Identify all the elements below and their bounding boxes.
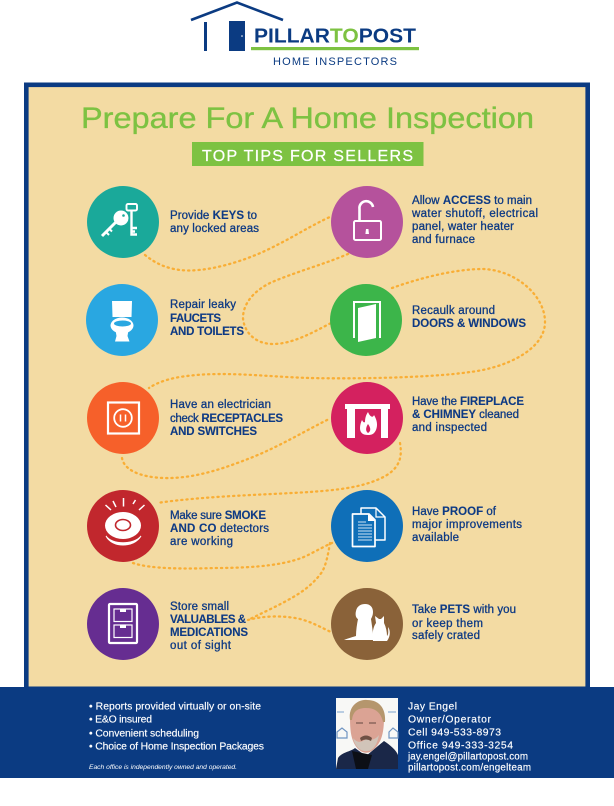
tip: pets: safely crated <box>412 630 480 642</box>
agent contact details: Office 949-333-3254 <box>408 740 513 752</box>
agent photo <box>336 698 398 769</box>
tip: doors and windows <box>330 284 526 356</box>
tip: proof <box>331 490 522 562</box>
tip: faucets and toilets: AND TOILETS <box>170 326 244 338</box>
logo tagline: HOME INSPECTORS <box>273 56 397 68</box>
tip: receptacles: AND SWITCHES <box>170 426 257 438</box>
tip text: Have an electrician <box>170 399 271 411</box>
logo wordmark: PILLARTOPOST <box>254 26 416 48</box>
tip text: Have PROOF of <box>412 506 497 518</box>
icon: house roof and door <box>191 2 283 51</box>
tip: keys: any locked areas <box>170 223 259 235</box>
tip: keys <box>87 186 259 258</box>
tip text: Allow ACCESS to main <box>412 195 532 207</box>
panel: footer <box>0 687 614 778</box>
agent contact details: Jay Engel <box>408 702 457 712</box>
tip: access: and furnace <box>412 234 475 246</box>
tip: access: water shutoff, electrical <box>411 208 538 220</box>
tip: valuables and medications: MEDICATIONS <box>170 627 248 639</box>
tip: smoke and CO detectors <box>87 490 269 562</box>
agent contact details: jay.engel@pillartopost.com <box>407 752 528 762</box>
benefits list: • Reports provided virtually or on-site <box>89 702 261 712</box>
dotted connector path <box>122 216 545 632</box>
tip text: Repair leaky <box>170 299 236 311</box>
tip: doors and windows: DOORS & WINDOWS <box>412 318 526 330</box>
subtitle banner <box>192 142 424 166</box>
tip: fireplace: & CHIMNEY cleaned <box>412 409 519 421</box>
benefits list: • Convenient scheduling <box>89 728 199 740</box>
icon: smoke alarm <box>87 490 159 562</box>
tip: fireplace: and inspected <box>412 422 487 434</box>
tip: fireplace <box>331 382 524 454</box>
tip: smoke and CO detectors: are working <box>170 536 233 548</box>
benefits list <box>89 702 264 752</box>
icon: dog and cat <box>331 588 403 660</box>
tip: proof: major improvements <box>412 519 522 531</box>
icon: open door <box>330 284 402 356</box>
agent contact details <box>407 702 531 774</box>
panel: tips background <box>26 85 588 689</box>
tip: receptacles <box>87 382 283 454</box>
tip text: Make sure SMOKE <box>170 510 266 522</box>
disclaimer: Each office is independently owned and operated. <box>89 765 237 771</box>
tip: valuables and medications: out of sight <box>170 640 232 652</box>
agent contact details: Owner/Operator <box>408 714 492 726</box>
tip: access <box>331 186 538 258</box>
logo <box>191 2 419 68</box>
icon: outlet <box>87 382 159 454</box>
subtitle banner: TOP TIPS FOR SELLERS <box>202 148 413 165</box>
tip: valuables and medications: VALUABLES & <box>170 614 246 626</box>
benefits list: • Choice of Home Inspection Packages <box>89 742 264 752</box>
icon: toilet <box>86 284 158 356</box>
icon: documents <box>331 490 403 562</box>
tip text: Store small <box>170 601 229 613</box>
tip: valuables and medications <box>87 588 248 660</box>
tip: pets: or keep them <box>412 618 483 630</box>
tip: smoke and CO detectors: AND CO detectors <box>170 523 269 535</box>
tip: pets <box>331 588 516 660</box>
tip text: Recaulk around <box>412 305 495 317</box>
agent contact details: pillartopost.com/engelteam <box>408 762 531 774</box>
agent contact details: Cell 949-533-8973 <box>408 728 501 738</box>
tip: faucets and toilets: FAUCETS <box>170 313 221 325</box>
tip text: Provide KEYS to <box>170 210 257 222</box>
icon: keys <box>87 186 159 258</box>
tip: access: panel, water heater <box>412 221 514 233</box>
tip: proof: available <box>412 532 459 544</box>
tip text: Have the FIREPLACE <box>412 396 524 408</box>
icon: filing cabinet <box>87 588 159 660</box>
icon: open padlock <box>331 186 403 258</box>
tip text: Take PETS with you <box>412 604 516 616</box>
tip: receptacles: check RECEPTACLES <box>170 413 283 425</box>
title: Prepare For A Home Inspection <box>81 102 534 135</box>
benefits list: • E&O insured <box>89 714 152 726</box>
icon: fireplace <box>331 382 403 454</box>
tip: faucets and toilets <box>86 284 244 356</box>
